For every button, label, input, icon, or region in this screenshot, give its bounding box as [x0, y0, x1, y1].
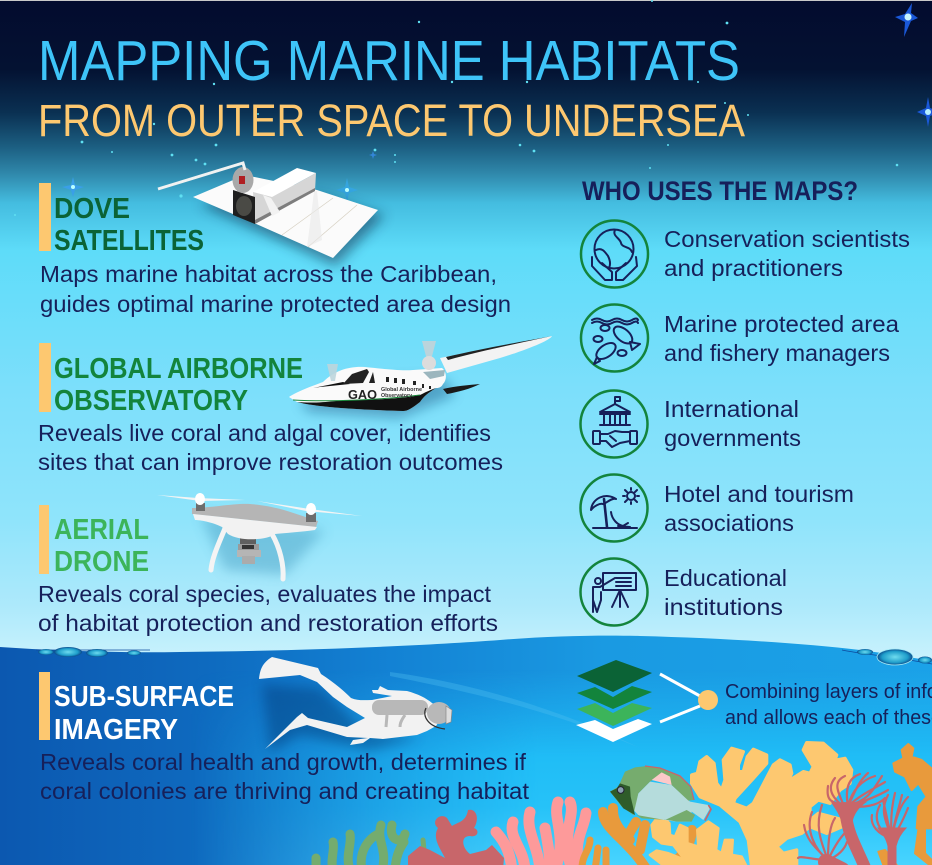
user: educational institutions: institutions	[664, 594, 783, 620]
user: educational institutions	[580, 558, 787, 626]
user: hotel and tourism	[580, 474, 854, 542]
sea anemones	[798, 773, 908, 865]
panel: sub-surface imagery	[39, 672, 530, 804]
wing	[440, 336, 552, 373]
panel: aerial drone: AERIAL	[54, 514, 149, 546]
panel: aerial drone: Reveals coral species, evaluates the impact	[38, 581, 492, 607]
water droplets left	[36, 647, 150, 657]
drone body	[192, 504, 318, 527]
drone legs	[211, 526, 226, 570]
coral: small yellow	[650, 814, 747, 865]
user: educational institutions: Educational	[664, 565, 787, 591]
panel: dove satellites	[39, 183, 511, 317]
panel: global airborne observatory: Reveals live coral and algal cover, identifies	[38, 420, 491, 446]
panel: sub-surface imagery: IMAGERY	[54, 714, 178, 746]
star: right edge sparkle	[917, 97, 932, 127]
airplane: Observatory	[381, 393, 413, 399]
coral: large yellow	[692, 743, 852, 865]
user: conservation scientists	[581, 220, 910, 288]
panel: aerial drone	[38, 505, 498, 636]
camera ball	[232, 167, 254, 193]
icon: teacher at board	[593, 573, 636, 612]
coral: pink	[496, 802, 586, 865]
antenna	[158, 163, 245, 189]
user: hotel and tourism: Hotel and tourism	[664, 481, 854, 507]
panel: global airborne observatory: OBSERVATORY	[54, 385, 248, 417]
connector to combining text	[660, 674, 718, 722]
airplane	[289, 336, 552, 418]
fish	[610, 766, 711, 822]
diver tank	[372, 700, 428, 715]
user: conservation scientists: Conservation scientists	[664, 226, 910, 252]
propellers	[422, 341, 436, 360]
solar panel	[193, 175, 378, 258]
airplane: Global Airborne	[381, 387, 422, 393]
diver head	[427, 702, 451, 724]
diver	[259, 657, 452, 752]
icon: beach umbrella and sun	[591, 488, 639, 528]
panel: global airborne observatory: GLOBAL AIRBORNE	[54, 353, 303, 385]
plane windows	[386, 377, 431, 389]
panel: aerial drone: of habitat protection and restoration efforts	[38, 610, 498, 636]
diver body	[259, 657, 445, 749]
panel: sub-surface imagery: SUB-SURFACE	[54, 681, 234, 713]
icon: government building and handshake	[593, 397, 637, 447]
title: FROM OUTER SPACE TO UNDERSEA	[38, 95, 745, 146]
drone	[157, 493, 362, 579]
panel: aerial drone: DRONE	[54, 546, 149, 578]
panel: sub-surface imagery: coral colonies are thriving and creating habitat	[40, 778, 530, 804]
water droplets right	[842, 649, 932, 665]
stars	[14, 0, 898, 216]
user: hotel and tourism: associations	[664, 510, 794, 536]
star: sparkle right of satellite	[336, 178, 358, 202]
fuselage	[289, 367, 446, 411]
icon: globe in hands	[592, 230, 637, 280]
star: small sparkle	[369, 151, 377, 159]
panel: dove satellites: SATELLITES	[54, 225, 204, 257]
heading: who uses the maps: WHO USES THE MAPS?	[582, 176, 858, 206]
tailplane	[443, 384, 480, 394]
user: international governments: International	[664, 396, 799, 422]
panel: sub-surface imagery: Reveals coral health and growth, determines if	[40, 749, 527, 775]
star: top right sparkle	[895, 3, 918, 37]
drone propellers	[157, 495, 362, 516]
drone camera	[240, 538, 256, 544]
user: marine protected area managers: Marine protected area	[664, 311, 899, 337]
lens	[233, 190, 255, 224]
coral: orange	[582, 808, 692, 865]
water surface	[0, 636, 932, 865]
panel: global airborne observatory	[38, 343, 503, 475]
coral: green	[316, 825, 424, 865]
user: international governments: governments	[664, 425, 801, 451]
text: combining layers	[725, 681, 932, 729]
icon: fish and waves	[592, 318, 640, 364]
user: international governments	[580, 390, 801, 458]
panel: dove satellites: Maps marine habitat across the Caribbean,	[40, 261, 497, 287]
panel: global airborne observatory: sites that can improve restoration outcomes	[38, 449, 503, 475]
icon: stacked layers	[576, 660, 652, 742]
user: conservation scientists: and practitioners	[664, 255, 843, 281]
star: sparkle by satellite	[62, 177, 84, 197]
satellite	[158, 163, 385, 266]
panel: dove satellites: DOVE	[54, 193, 130, 225]
title: MAPPING MARINE HABITATS	[38, 29, 740, 93]
user: marine protected area managers	[581, 304, 899, 372]
coral: red	[408, 810, 504, 865]
user: marine protected area managers: and fishery managers	[664, 340, 890, 366]
title	[38, 29, 745, 146]
panel: dove satellites: guides optimal marine protected area design	[40, 291, 511, 317]
coral: far right orange	[878, 744, 932, 865]
plane logo text: GAO	[348, 387, 377, 402]
